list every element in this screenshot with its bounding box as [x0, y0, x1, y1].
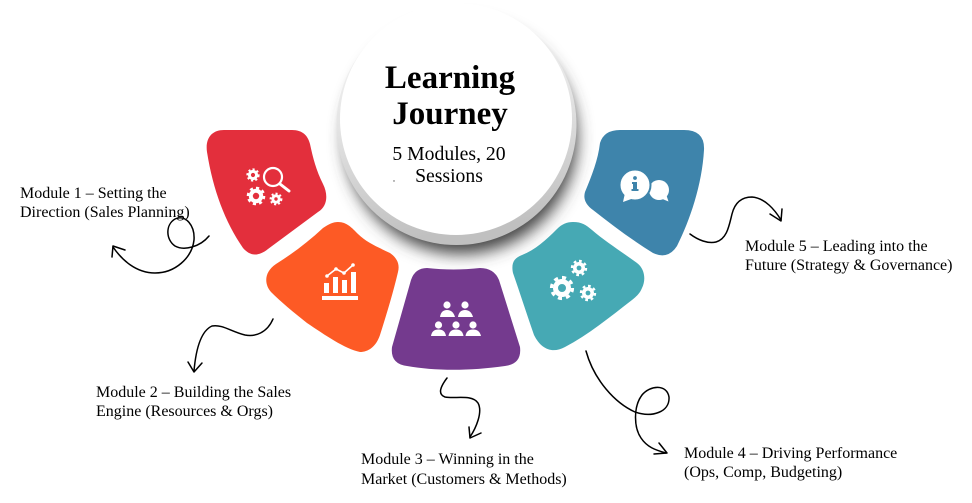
panel: module 4 teal [512, 222, 644, 350]
arrow: module 3 [441, 378, 481, 438]
arrow: module 2 [188, 319, 273, 372]
icon: three gears [552, 261, 595, 300]
icon: group of people [431, 301, 481, 336]
panel: module 3 purple [392, 268, 520, 370]
label: module 3: Market (Customers & Methods) [361, 471, 567, 488]
arrow: module 1 [112, 218, 209, 273]
panel: module 1 red [207, 130, 326, 255]
subtitle: Sessions [415, 165, 483, 187]
label: module 2: Engine (Resources & Orgs) [96, 403, 273, 420]
subtitle [392, 143, 506, 187]
label: module 3: Module 3 – Winning in the [361, 451, 534, 468]
title [385, 60, 516, 132]
label: module 4: Module 4 – Driving Performance [684, 445, 897, 462]
arrow: module 4 [586, 351, 669, 454]
label: module 2: Module 2 – Building the Sales [96, 384, 291, 401]
title: Learning [385, 60, 516, 96]
subtitle: 5 Modules, 20 [392, 143, 506, 165]
icon: bar chart with trend line [322, 263, 358, 300]
icon: speech bubbles with info mark [620, 170, 669, 202]
panel: module 5 blue [584, 130, 704, 255]
central circle [336, 3, 577, 254]
label: module 1: Module 1 – Setting the [20, 185, 167, 202]
label: module 5: Module 5 – Leading into the [745, 238, 928, 255]
title: Journey [392, 96, 508, 132]
label: module 4: (Ops, Comp, Budgeting) [684, 464, 842, 481]
icon: gears and magnifier [247, 168, 289, 204]
label: module 5: Future (Strategy & Governance) [745, 257, 952, 274]
label: module 1: Direction (Sales Planning) [20, 204, 190, 221]
arrow: module 5 [690, 197, 782, 243]
panel: module 2 orange [266, 222, 399, 352]
